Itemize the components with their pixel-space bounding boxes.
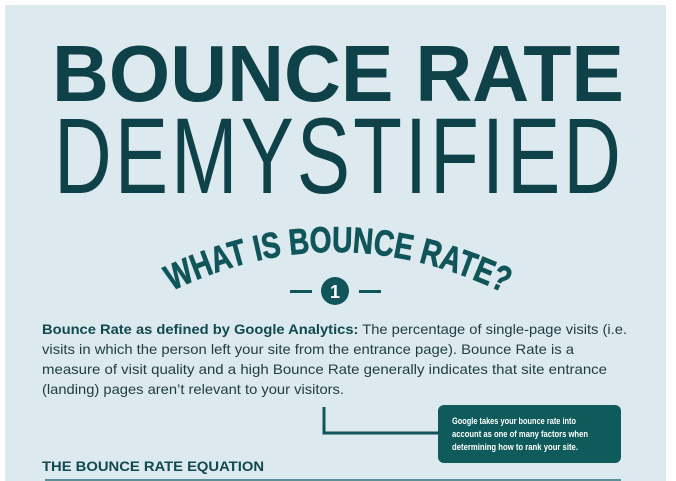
callout: google ranking: Google takes your bounce rate into xyxy=(452,416,576,426)
heading: what is bounce rate (curved): WHAT IS BOUNCE RATE? xyxy=(161,226,512,290)
callout: google ranking xyxy=(438,405,621,463)
equation panel top edge xyxy=(45,479,621,481)
callout: google ranking: account as one of many factors when xyxy=(452,429,588,439)
heading: the bounce rate equation: THE BOUNCE RATE EQUATION xyxy=(42,458,264,474)
title line 1: BOUNCE RATE xyxy=(52,29,624,118)
text block: definition: Bounce Rate as defined by Google Analytics: The percentage of single-page visits (i.e. xyxy=(42,321,627,337)
section number badge: 1 xyxy=(330,282,340,302)
text block: definition xyxy=(42,321,627,397)
callout: google ranking: determining how to rank your site. xyxy=(452,442,578,452)
text block: definition: measure of visit quality and a high Bounce Rate generally indicates that site entrance xyxy=(42,361,607,377)
connector line to callout xyxy=(324,407,440,433)
text block: definition: (landing) pages aren’t relevant to your visitors. xyxy=(42,381,344,397)
section number badge xyxy=(290,277,381,305)
text block: definition: visits in which the person left your site from the entrance page). Bounce Rate is a xyxy=(42,341,574,357)
